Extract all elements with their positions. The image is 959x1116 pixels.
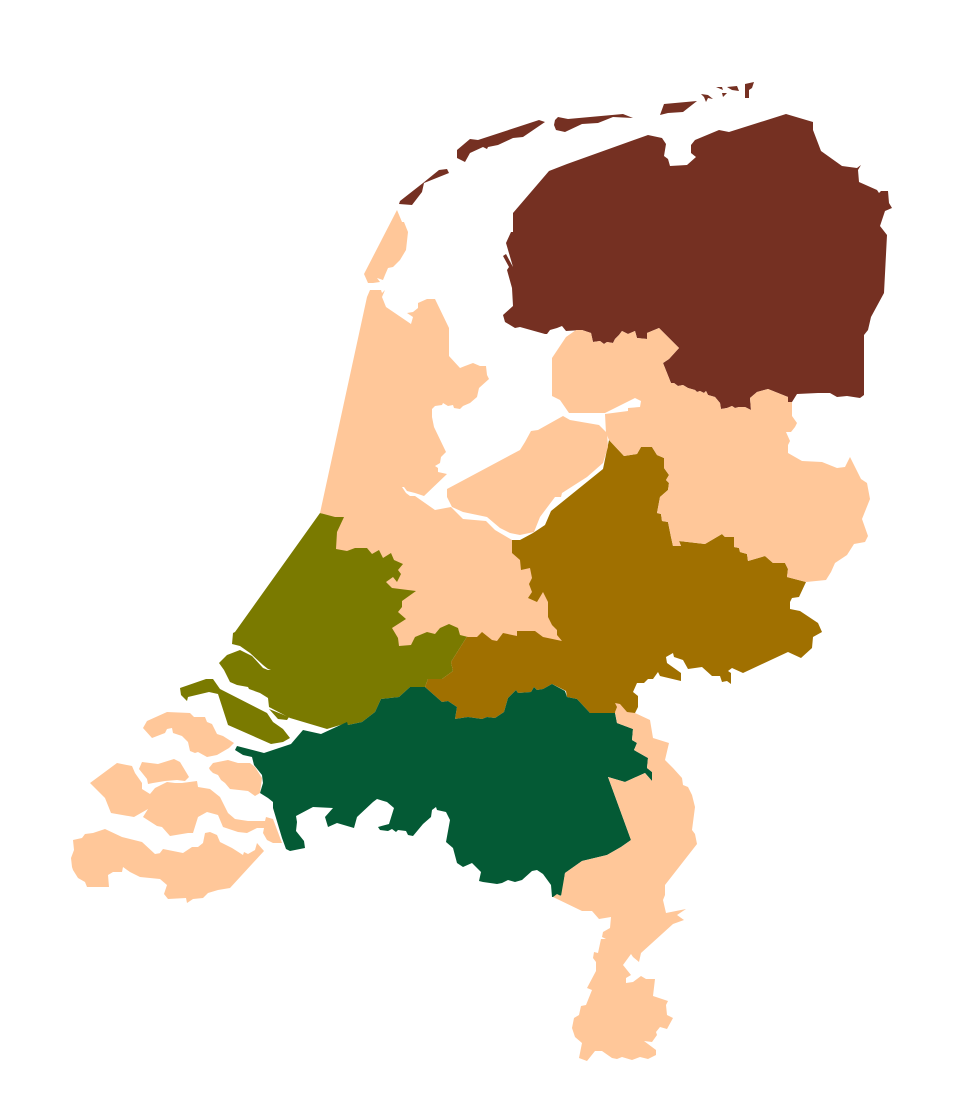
- island: [399, 169, 449, 205]
- region: peach provinces: [71, 210, 870, 1061]
- region: north (brown): [399, 82, 892, 410]
- island: [457, 120, 545, 162]
- Flevoland: [447, 416, 608, 535]
- island: [745, 82, 754, 98]
- Tholen: [209, 760, 262, 796]
- Limburg: [553, 703, 697, 1061]
- region: west (olive): [180, 513, 468, 744]
- Texel: [364, 210, 408, 283]
- region: centre (gold): [425, 440, 822, 719]
- North Holland and Utrecht: [320, 290, 562, 646]
- island: [722, 93, 727, 97]
- island: [701, 94, 713, 102]
- island: [716, 87, 723, 90]
- Overijssel and Noordoostpolder: [552, 328, 870, 582]
- Schouwen: [143, 712, 234, 757]
- Noord-Beveland: [139, 759, 189, 784]
- island: [660, 101, 697, 115]
- island: [554, 114, 633, 132]
- Zeeuws-Vlaanderen: [71, 829, 264, 903]
- region: south (green): [235, 684, 652, 897]
- island: [727, 86, 739, 91]
- Walcheren and Zuid-Beveland: [90, 763, 282, 843]
- main northern provinces: [503, 114, 892, 410]
